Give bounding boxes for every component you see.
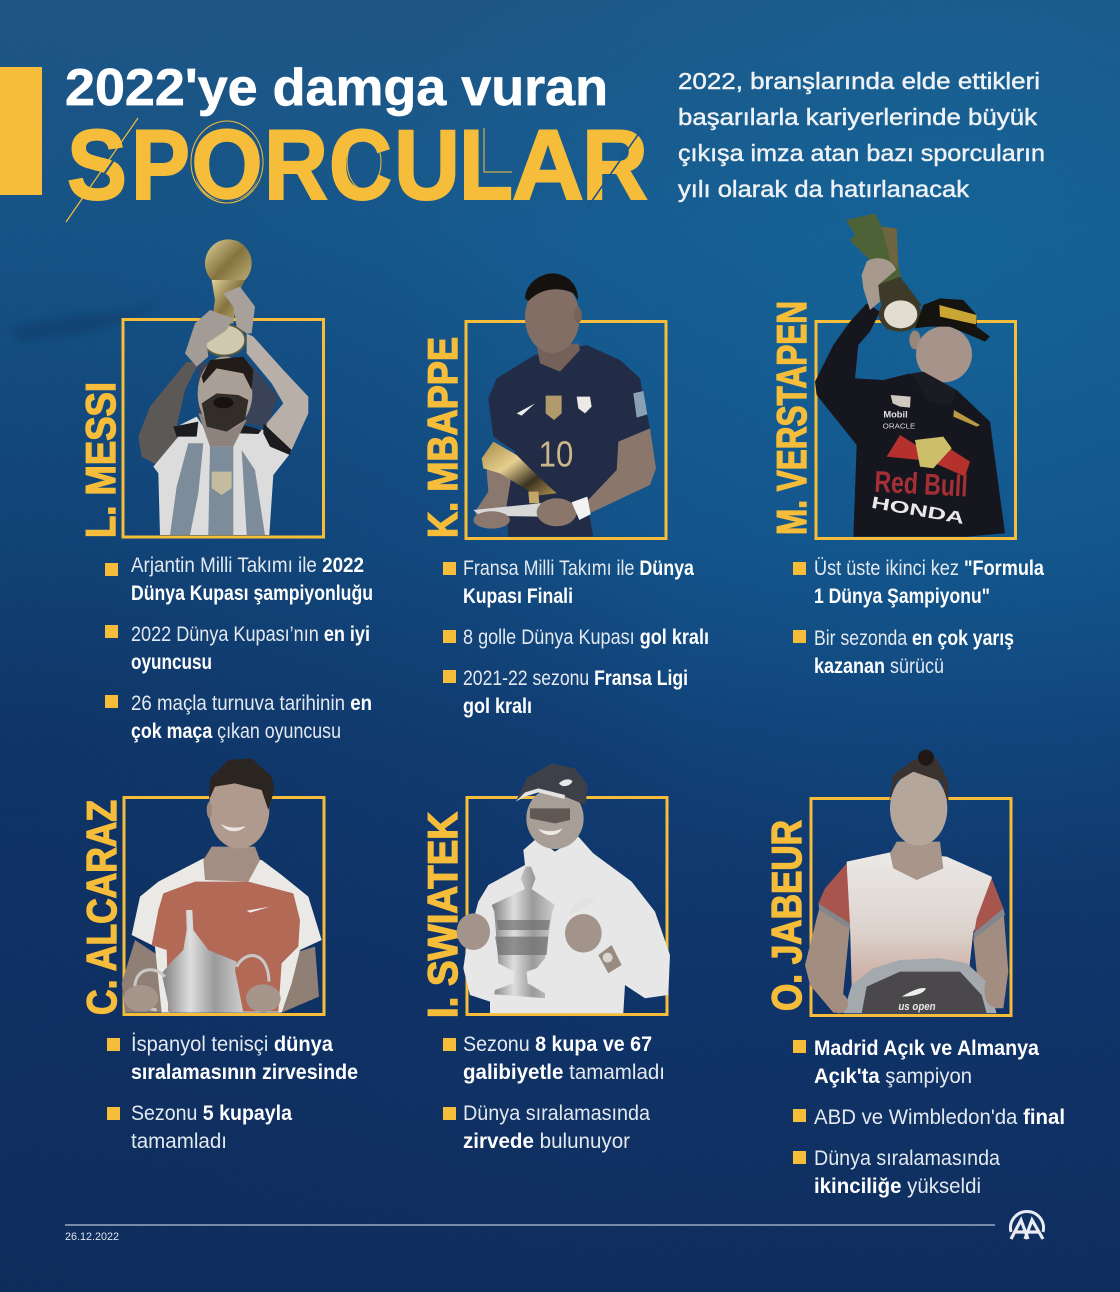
panel: Messi [77, 239, 324, 538]
title line 2 [66, 109, 648, 222]
bullets: Verstappen: Bir sezonda en çok yarış [814, 626, 1014, 650]
bullets: Mbappe: 2021-22 sezonu Fransa Ligi [463, 666, 688, 690]
photo: Verstappen: Red Bull [874, 466, 969, 504]
frame [124, 798, 324, 1014]
photo: Verstappen: ORACLE [883, 423, 916, 430]
bullets: Alcaraz: İspanyol tenisçi dünya [131, 1032, 334, 1056]
title line 2: S [67, 109, 127, 220]
bullets: Messi [105, 553, 373, 743]
title line 2: L [459, 109, 513, 220]
title line 2: C [329, 109, 392, 220]
bullet marker [105, 563, 118, 576]
photo: Mbappe: 10 [539, 434, 573, 475]
accent bar [0, 67, 42, 195]
intro text: 2022, branşlarında elde ettikleri [678, 68, 1040, 94]
intro text: başarılarla kariyerlerinde büyük [678, 104, 1038, 130]
bullets: Mbappe [443, 556, 709, 718]
frame [123, 320, 324, 537]
frame [467, 798, 667, 1014]
photo: Mbappe [473, 273, 656, 537]
bullets: Mbappe: Kupası Finali [463, 584, 573, 608]
bullets: Messi: Arjantin Milli Takımı ile 2022 [131, 553, 364, 577]
bullet marker [793, 1151, 806, 1164]
name: I. SWIATEK [419, 812, 466, 1018]
photo: Verstappen [815, 213, 1005, 537]
intro text [678, 68, 1045, 202]
bullets: Messi: çok maça çıkan oyuncusu [131, 719, 341, 743]
photo: Jabeur [805, 750, 1008, 1013]
title [65, 59, 648, 222]
name: L. MESSI [77, 382, 124, 538]
bullets: Swiatek: galibiyetle tamamladı [463, 1060, 665, 1084]
bullet marker [793, 630, 806, 643]
name: M. VERSTAPEN [768, 301, 815, 535]
icon: AA logo [1010, 1211, 1044, 1239]
intro text: yılı olarak da hatırlanacak [678, 176, 970, 202]
intro text: çıkışa imza atan bazı sporcuların [678, 140, 1045, 166]
bullet marker [443, 1107, 456, 1120]
bullet marker [443, 630, 456, 643]
bullets: Swiatek: Dünya sıralamasında [463, 1101, 650, 1125]
panel: Swiatek [419, 763, 670, 1018]
bullets: Mbappe: Fransa Milli Takımı ile Dünya [463, 556, 695, 580]
date: 26.12.2022 [65, 1231, 119, 1243]
bullets: Messi: 26 maçla turnuva tarihinin en [131, 691, 372, 715]
bullets: Jabeur: Açık'ta şampiyon [814, 1064, 972, 1088]
bullets: Swiatek: Sezonu 8 kupa ve 67 [463, 1032, 652, 1056]
frame [816, 322, 1016, 538]
panel: Jabeur [763, 750, 1011, 1016]
bullets: Messi: oyuncusu [131, 650, 212, 674]
title line 2: R [582, 109, 648, 220]
bullets: Verstappen: 1 Dünya Şampiyonu" [814, 584, 990, 608]
bullet marker [443, 1038, 456, 1051]
name: O. JABEUR [763, 820, 810, 1011]
title line 2: A [512, 109, 584, 220]
title line 2: U [394, 109, 460, 220]
bullets: Messi: 2022 Dünya Kupası’nın en iyi [131, 622, 370, 646]
bullets: Mbappe: gol kralı [463, 694, 532, 718]
bullet marker [105, 625, 118, 638]
bullets: Mbappe: 8 golle Dünya Kupası gol kralı [463, 625, 709, 649]
bullet marker [443, 670, 456, 683]
photo: Verstappen: Mobil [883, 410, 908, 420]
bullets: Swiatek [443, 1032, 665, 1153]
bullets: Verstappen [793, 556, 1045, 678]
title line 2: P [131, 109, 190, 220]
panel: Alcaraz [78, 758, 324, 1015]
bullets: Verstappen: Üst üste ikinci kez "Formula [814, 556, 1045, 580]
frame [466, 322, 666, 538]
photo: Swiatek [457, 763, 670, 1013]
bullets: Jabeur: Dünya sıralamasında [814, 1146, 1000, 1170]
bullets: Jabeur: Madrid Açık ve Almanya [814, 1036, 1040, 1060]
title line 2: O [191, 109, 263, 220]
panel: Mbappe [419, 273, 666, 538]
footer rule [65, 1224, 995, 1226]
bullets: Verstappen: kazanan sürücü [814, 654, 944, 678]
panel: Verstappen [768, 213, 1016, 538]
bullets: Jabeur: ikinciliğe yükseldi [814, 1174, 981, 1198]
bullet marker [107, 1038, 120, 1051]
frame [811, 798, 1011, 1016]
title line 1: 2022'ye damga vuran [65, 59, 608, 117]
bullet marker [105, 695, 118, 708]
bullets: Messi: Dünya Kupası şampiyonluğu [131, 581, 373, 605]
bullets: Jabeur [793, 1036, 1065, 1198]
bullet marker [107, 1107, 120, 1120]
bullets: Alcaraz [107, 1032, 358, 1153]
photo: Jabeur: us open [898, 1001, 936, 1013]
photo: Verstappen: HONDA [870, 493, 966, 528]
photo: Messi [138, 239, 308, 535]
bullets: Jabeur: ABD ve Wimbledon'da final [814, 1105, 1065, 1129]
bullet marker [793, 1040, 806, 1053]
bullets: Alcaraz: tamamladı [131, 1129, 227, 1153]
bullet marker [443, 562, 456, 575]
photo: Alcaraz [122, 758, 322, 1013]
name: C. ALCARAZ [78, 800, 125, 1015]
bullets: Swiatek: zirvede bulunuyor [463, 1129, 630, 1153]
title line 2: R [264, 109, 328, 220]
name: K. MBAPPE [419, 337, 466, 538]
bullet marker [793, 562, 806, 575]
bullets: Alcaraz: Sezonu 5 kupayla [131, 1101, 293, 1125]
bullet marker [793, 1109, 806, 1122]
bullets: Alcaraz: sıralamasının zirvesinde [131, 1060, 358, 1084]
